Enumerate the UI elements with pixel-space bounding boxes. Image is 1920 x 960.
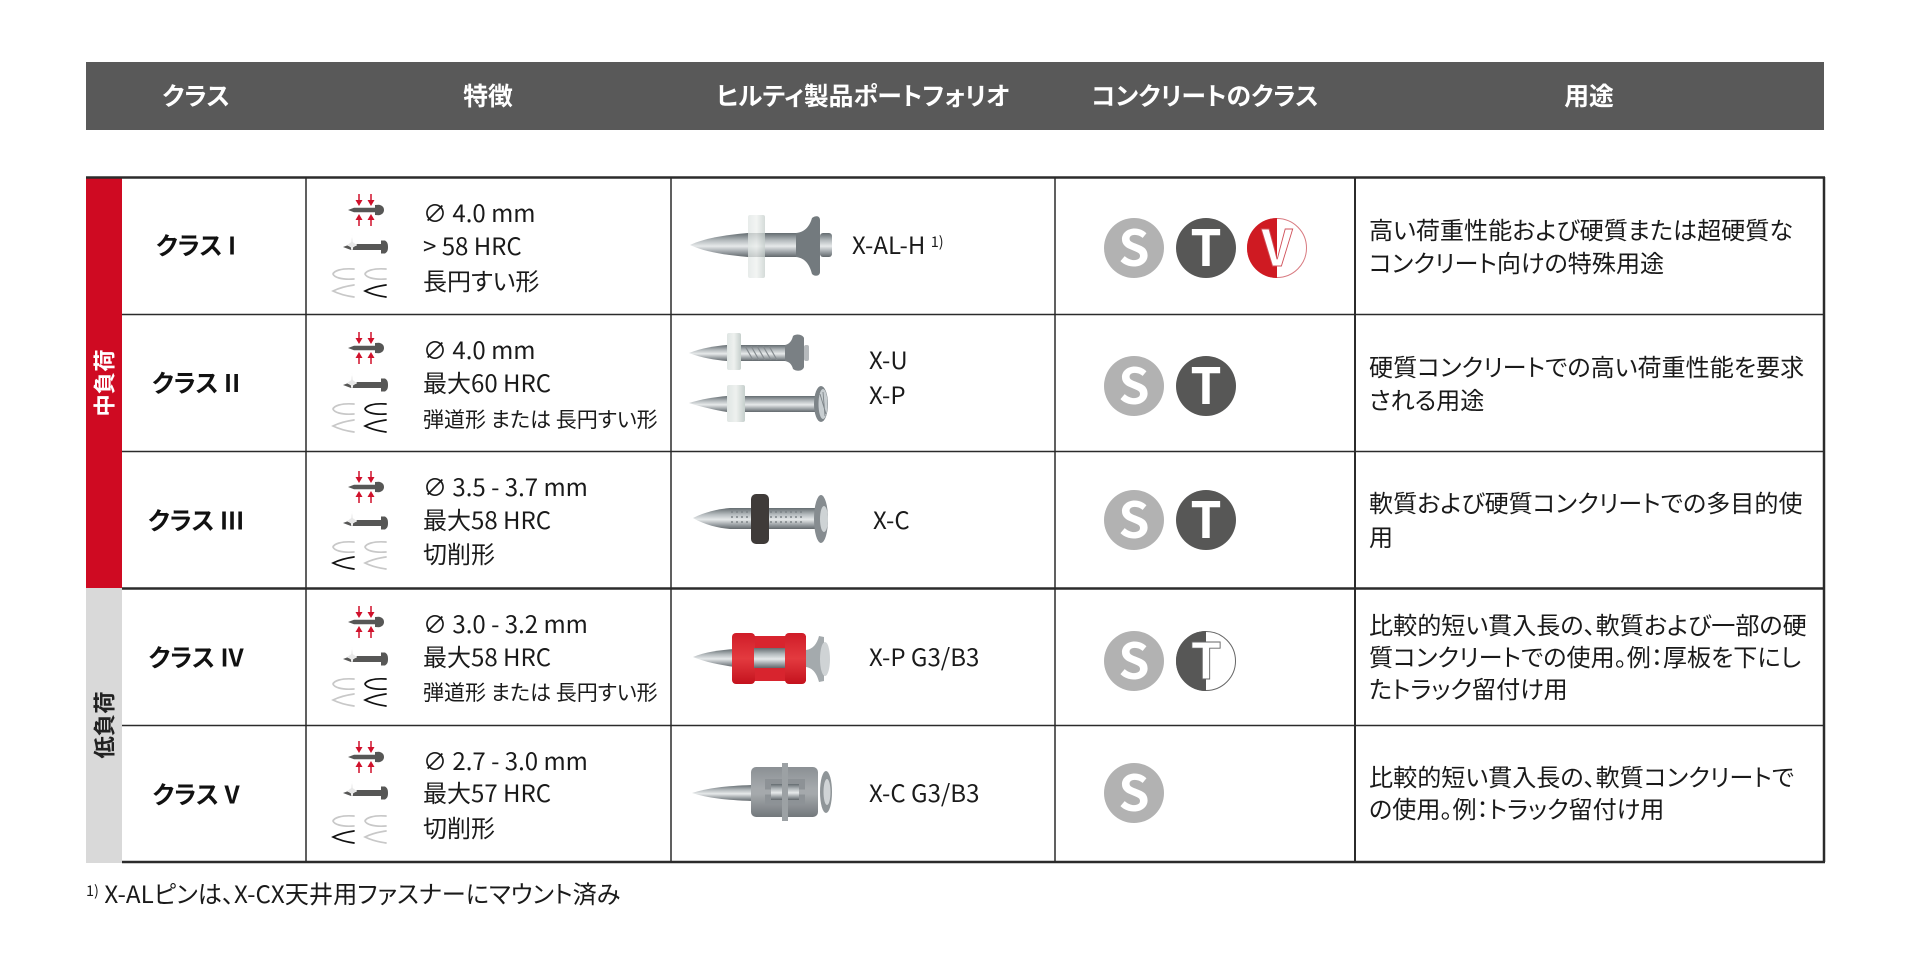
class II specs: 最大60 HRC	[423, 364, 551, 399]
concrete badges S T	[1104, 481, 1236, 553]
class III application text	[1369, 484, 1803, 553]
class I application text	[1369, 211, 1793, 279]
label: X-C: X-C	[873, 501, 910, 536]
pin: X-P	[689, 385, 828, 422]
class V application text: 比較的短い貫入長の、軟質コンクリートで	[1369, 758, 1794, 793]
class IV specs: 弾道形 または 長円すい形	[423, 677, 658, 707]
concrete badges S T V	[1104, 209, 1306, 281]
class II label: クラス II	[152, 365, 240, 400]
row: class IV	[148, 605, 1807, 707]
sidebar: low load: 低負荷	[88, 691, 120, 759]
class II specs: 弾道形 または 長円すい形	[423, 404, 658, 434]
class I specs: 長円すい形	[423, 262, 539, 297]
class III label: クラス III	[148, 502, 244, 538]
label: X-C G3/B3: X-C G3/B3	[869, 774, 979, 809]
concrete badge S	[1104, 754, 1164, 826]
class V specs: 最大57 HRC	[423, 774, 551, 809]
class III icons	[333, 471, 388, 569]
pin: X-C G3/B3	[692, 763, 832, 821]
class I specs	[423, 194, 539, 297]
class V specs	[423, 742, 588, 844]
class IV application text: 比較的短い貫入長の、軟質および一部の硬	[1369, 606, 1807, 641]
class II application text: 硬質コンクリートでの高い荷重性能を要求	[1369, 348, 1804, 383]
concrete badges S T V: V	[1261, 209, 1294, 281]
class I application text: 高い荷重性能および硬質または超硬質な	[1369, 211, 1793, 246]
label: X-AL-H: X-AL-H	[852, 226, 925, 261]
label: X-AL-H: 1)	[931, 231, 944, 252]
pin: X-AL-H	[690, 215, 832, 278]
header: class: クラス	[162, 77, 230, 113]
class IV label: クラス IV	[148, 640, 245, 674]
class III application text: 軟質および硬質コンクリートでの多目的使	[1369, 484, 1803, 519]
label: X-P G3/B3: X-P G3/B3	[869, 638, 979, 673]
header: concrete class: コンクリートのクラス	[1091, 77, 1319, 113]
concrete badges S half-T	[1104, 622, 1236, 694]
class V application text	[1369, 758, 1794, 825]
class III specs: 最大58 HRC	[423, 501, 551, 536]
class III specs: ∅ 3.5 - 3.7 mm	[423, 468, 588, 503]
class V label: クラス V	[152, 776, 241, 812]
pin: X-C	[693, 494, 828, 544]
class III application text: 用	[1369, 518, 1393, 553]
class III specs: 切削形	[423, 535, 495, 570]
row: class V	[152, 741, 1794, 844]
sidebar: low load	[86, 588, 122, 863]
concrete badges S T	[1104, 347, 1236, 419]
class II application text	[1369, 348, 1804, 416]
class IV specs	[423, 605, 658, 707]
label: X-P: X-P	[869, 376, 906, 411]
row: class III	[148, 468, 1803, 570]
class II specs	[423, 331, 658, 434]
class IV specs: ∅ 3.0 - 3.2 mm	[423, 605, 588, 640]
header: portfolio: ヒルティ製品ポートフォリオ	[716, 77, 1010, 113]
class V specs: ∅ 2.7 - 3.0 mm	[423, 742, 588, 777]
row: class I	[156, 194, 1793, 297]
class I specs: > 58 HRC	[423, 227, 522, 262]
row: class II	[152, 331, 1804, 434]
class IV application text	[1369, 606, 1807, 705]
label: X-U: X-U	[869, 341, 908, 376]
class I specs: ∅ 4.0 mm	[423, 194, 536, 229]
class I icons	[333, 194, 388, 297]
class IV application text: たトラック留付け用	[1369, 670, 1568, 705]
class III specs	[423, 468, 588, 570]
class II specs: ∅ 4.0 mm	[423, 331, 536, 366]
class II icons	[333, 332, 388, 432]
class II application text: される用途	[1369, 381, 1484, 416]
header: features: 特徴	[463, 77, 513, 113]
table grid	[86, 177, 1825, 862]
pin: X-P G3/B3	[693, 633, 830, 684]
class I label: クラス I	[156, 228, 236, 262]
footnote: 1)	[86, 880, 99, 901]
header bar	[86, 62, 1824, 130]
class V icons	[333, 741, 388, 843]
class V specs: 切削形	[423, 809, 495, 844]
sidebar: medium load	[86, 177, 122, 588]
class I application text: コンクリート向けの特殊用途	[1369, 244, 1664, 279]
concrete badges S half-T: T	[1190, 622, 1222, 694]
class IV icons	[333, 606, 388, 706]
pin: X-U	[689, 333, 809, 371]
footnote: X-ALピンは、X-CX天井用ファスナーにマウント済み	[99, 875, 620, 910]
class V application text: の使用。例：トラック留付け用	[1369, 790, 1664, 825]
sidebar: medium load: 中負荷	[88, 349, 120, 417]
class IV application text: 質コンクリートでの使用。例：厚板を下にし	[1369, 638, 1801, 673]
header: applications: 用途	[1564, 77, 1614, 113]
class IV specs: 最大58 HRC	[423, 638, 551, 673]
